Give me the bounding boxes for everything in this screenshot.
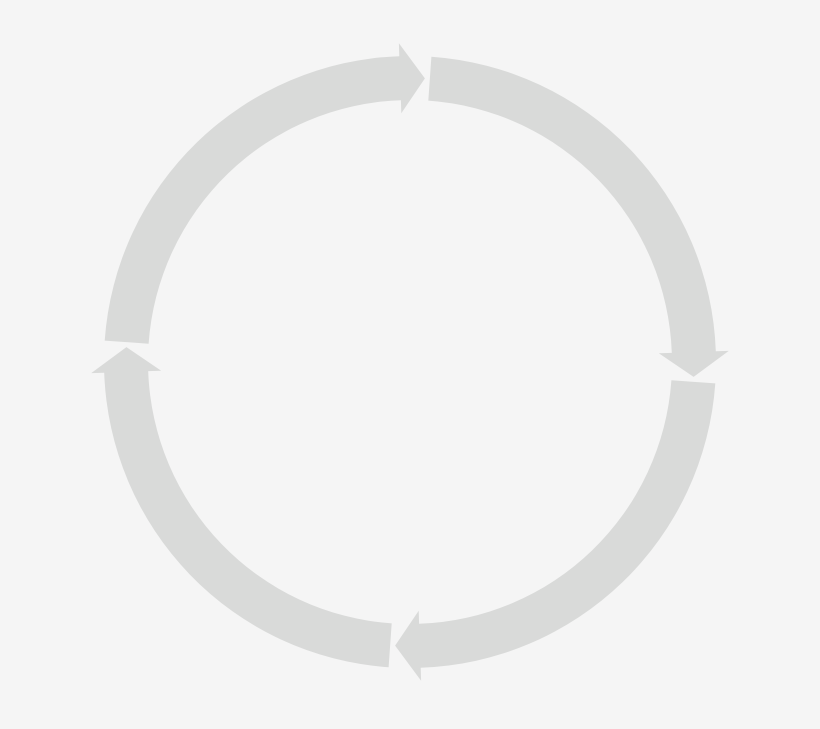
arrow: top <box>105 43 425 344</box>
arrow: right <box>428 57 729 377</box>
arrow: left <box>91 347 392 667</box>
arrow: bottom <box>395 380 715 681</box>
